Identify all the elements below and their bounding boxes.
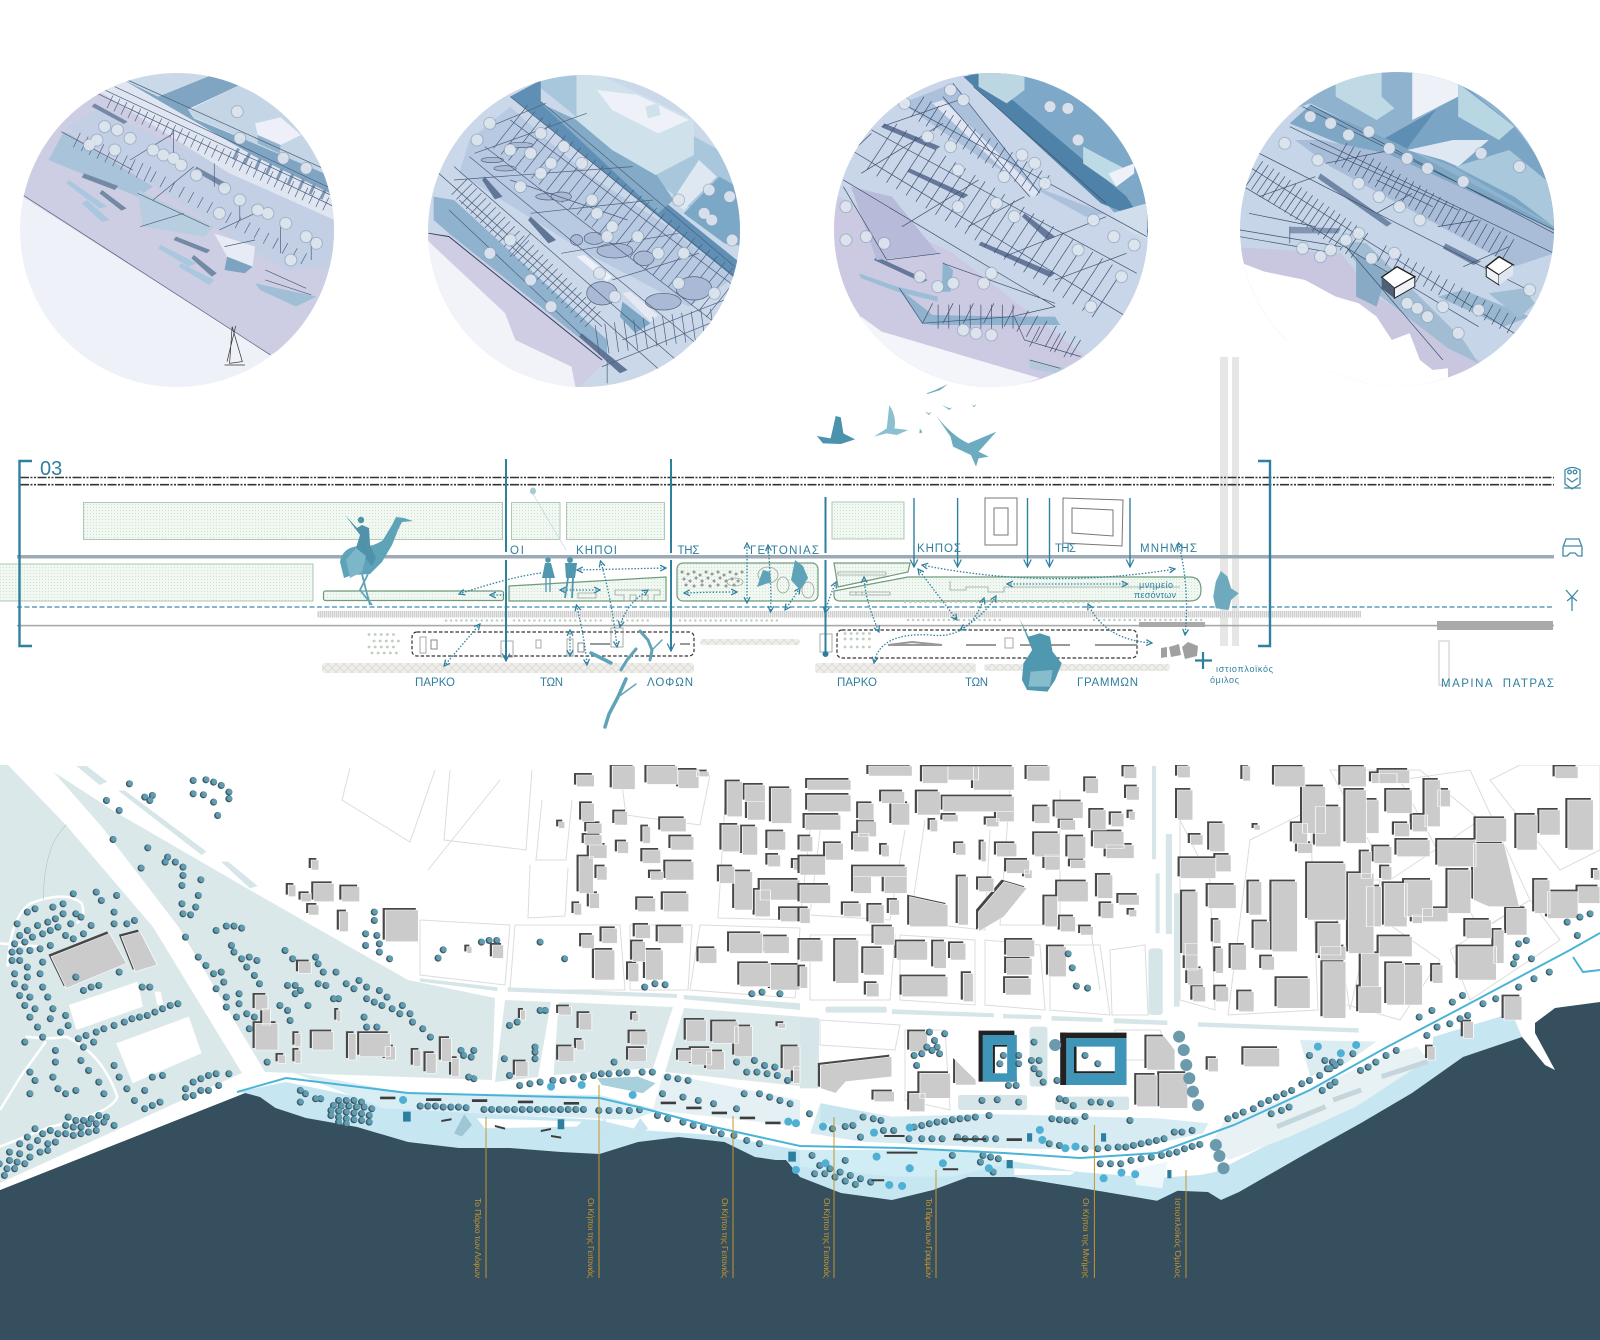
figures: divers (591, 631, 662, 727)
inner pavilions (420, 628, 1137, 657)
white roads and sports fields in park (0, 766, 800, 1147)
buildings left half (48, 764, 800, 1083)
labels: garden and park names: ΚΗΠΟΙ (576, 545, 617, 557)
cross marker (1195, 652, 1212, 669)
labels: garden and park names (415, 543, 1554, 690)
pebble pattern (682, 572, 742, 586)
site plan map (0, 764, 1600, 1340)
waterfront pavilions and bars (380, 1097, 1171, 1181)
axonometric circle 4: sailing club (1240, 72, 1554, 386)
rotated labels: Το Πάρκο των Γραμμών (924, 1198, 934, 1278)
rail lines (20, 478, 1554, 485)
highlighted memorial blocks (979, 1031, 1127, 1085)
labels: garden and park names: όμιλος (1210, 675, 1240, 685)
figures: children and kite (530, 488, 577, 598)
bracket left (20, 461, 32, 646)
orange leader lines and labels (473, 1085, 1186, 1278)
labels: garden and park names: ΛΟΦΩΝ (647, 677, 693, 689)
small dot field (369, 634, 870, 653)
rotated labels (473, 1198, 1183, 1278)
blue section cuts with arrows (506, 459, 1130, 661)
riverside garden plots (324, 563, 1201, 601)
labels: garden and park names: μνημείο (1139, 580, 1173, 590)
small gull (874, 405, 908, 437)
trees (0, 779, 1591, 1186)
labels: garden and park names: ΤΗΣ (678, 545, 700, 557)
rotated labels: Οι Κήποι της Μνήμης (1081, 1198, 1091, 1278)
promenade paving west (291, 1072, 800, 1140)
labels: garden and park names: πεσόντων (1134, 590, 1176, 600)
labels: garden and park names: ΤΩΝ (540, 677, 563, 689)
dock shapes (1161, 642, 1198, 659)
labels: garden and park names: ΜΑΡΙΝΑ ΠΑΤΡΑΣ (1441, 678, 1554, 690)
light gray vertical axis (1220, 357, 1239, 646)
icon: pedestrian bicycle symbol (1566, 590, 1578, 611)
labels: garden and park names: ΤΗΣ (1055, 543, 1076, 555)
hatched rail band (317, 611, 1361, 618)
axonometric circle 1: park of the hills (20, 73, 334, 387)
birds (817, 384, 996, 467)
promenade blue line (237, 933, 1600, 1158)
main road (17, 555, 1554, 558)
plot line-work (578, 567, 1180, 601)
green park blocks (0, 502, 904, 601)
labels: garden and park names: ιστιοπλοϊκός (1216, 664, 1274, 674)
rotated labels: Οι Κήποι της Γειτονιάς (822, 1198, 832, 1278)
waterfront band (238, 1016, 1522, 1201)
dashed zones (412, 630, 1137, 658)
labels: garden and park names: ΠΑΡΚΟ (415, 677, 455, 689)
figure: rider on crane (340, 515, 413, 605)
rotated labels: Ιστιοπλοϊκός Όμιλος (1173, 1198, 1183, 1278)
distant birds (919, 384, 977, 433)
labels: garden and park names: ΜΝΗΜΗΣ (1140, 543, 1197, 555)
large gull (937, 417, 996, 467)
icon: train (1564, 468, 1581, 489)
figure: mermaid on fish (817, 416, 855, 444)
strategy diagram (0, 357, 1582, 727)
rotated labels: Το Πάρκο των Λόφων (473, 1198, 483, 1278)
marina block (1139, 621, 1553, 685)
axonometric circle 3: memory garden (826, 70, 1157, 393)
coastal white edge left (0, 1092, 245, 1190)
rotated labels: Οι Κήποι της Γειτονιάς (720, 1198, 730, 1278)
dotted circulation arrows (444, 543, 1187, 666)
tree dot row (446, 602, 1205, 620)
park fields (0, 765, 819, 1183)
coast road line (17, 625, 1554, 626)
bracket right (1258, 461, 1270, 646)
pedestrian dashed line (17, 606, 1554, 608)
labels: garden and park names: ΚΗΠΟΣ (917, 543, 961, 555)
labels: garden and park names: ΤΩΝ (965, 677, 988, 689)
rotated labels: Οι Κήποι της Γειτονιάς (586, 1198, 596, 1278)
median strips left (77, 766, 800, 1010)
section number: 03 (40, 458, 62, 480)
figures: neighbours in pebble garden (757, 560, 808, 590)
building footprints (985, 498, 1123, 546)
labels: garden and park names: ΓΡΑΜΜΩΝ (1077, 677, 1138, 689)
axonometric circle 2: neighbourhood gardens (428, 75, 740, 387)
figure: seated old man (1213, 571, 1239, 610)
promenade paving (800, 1040, 1428, 1188)
labels: garden and park names: ΟΙ (510, 545, 524, 557)
bottom hatched strips (322, 639, 1170, 673)
figure: embracing couple (1019, 618, 1062, 692)
buildings right half (797, 764, 1600, 1112)
icon: car (1563, 539, 1582, 556)
median strips and green squares right (800, 766, 1359, 1110)
labels: garden and park names: ΠΑΡΚΟ (837, 677, 877, 689)
sea (0, 1002, 1600, 1340)
labels: garden and park names: ΓΕΙΤΟΝΙΑΣ (750, 545, 819, 557)
street grid blocks (342, 765, 1600, 1110)
